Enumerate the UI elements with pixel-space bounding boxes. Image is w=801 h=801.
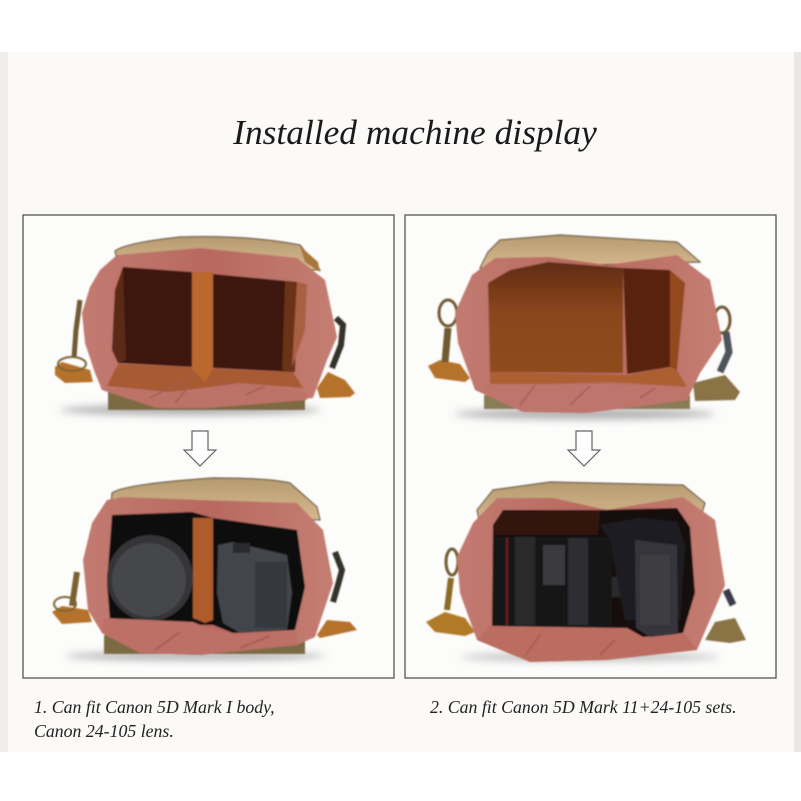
bag: empty without divider: [428, 235, 740, 419]
caption: left: 1. Can fit Canon 5D Mark I body,: [34, 697, 275, 717]
bag: empty with divider: [55, 237, 355, 415]
title: Installed machine display: [233, 112, 597, 152]
icon: down arrow: [184, 431, 216, 466]
bag: with lens and camera body: [52, 478, 357, 660]
panel: left: [23, 215, 394, 678]
caption: left: [34, 697, 275, 741]
panel: right: [405, 215, 776, 678]
bag: with camera and zoom lens: [426, 482, 746, 662]
icon: down arrow: [568, 431, 600, 466]
caption: right: 2. Can fit Canon 5D Mark 11+24-105 sets.: [430, 697, 737, 717]
caption: left: Canon 24-105 lens.: [34, 721, 174, 741]
